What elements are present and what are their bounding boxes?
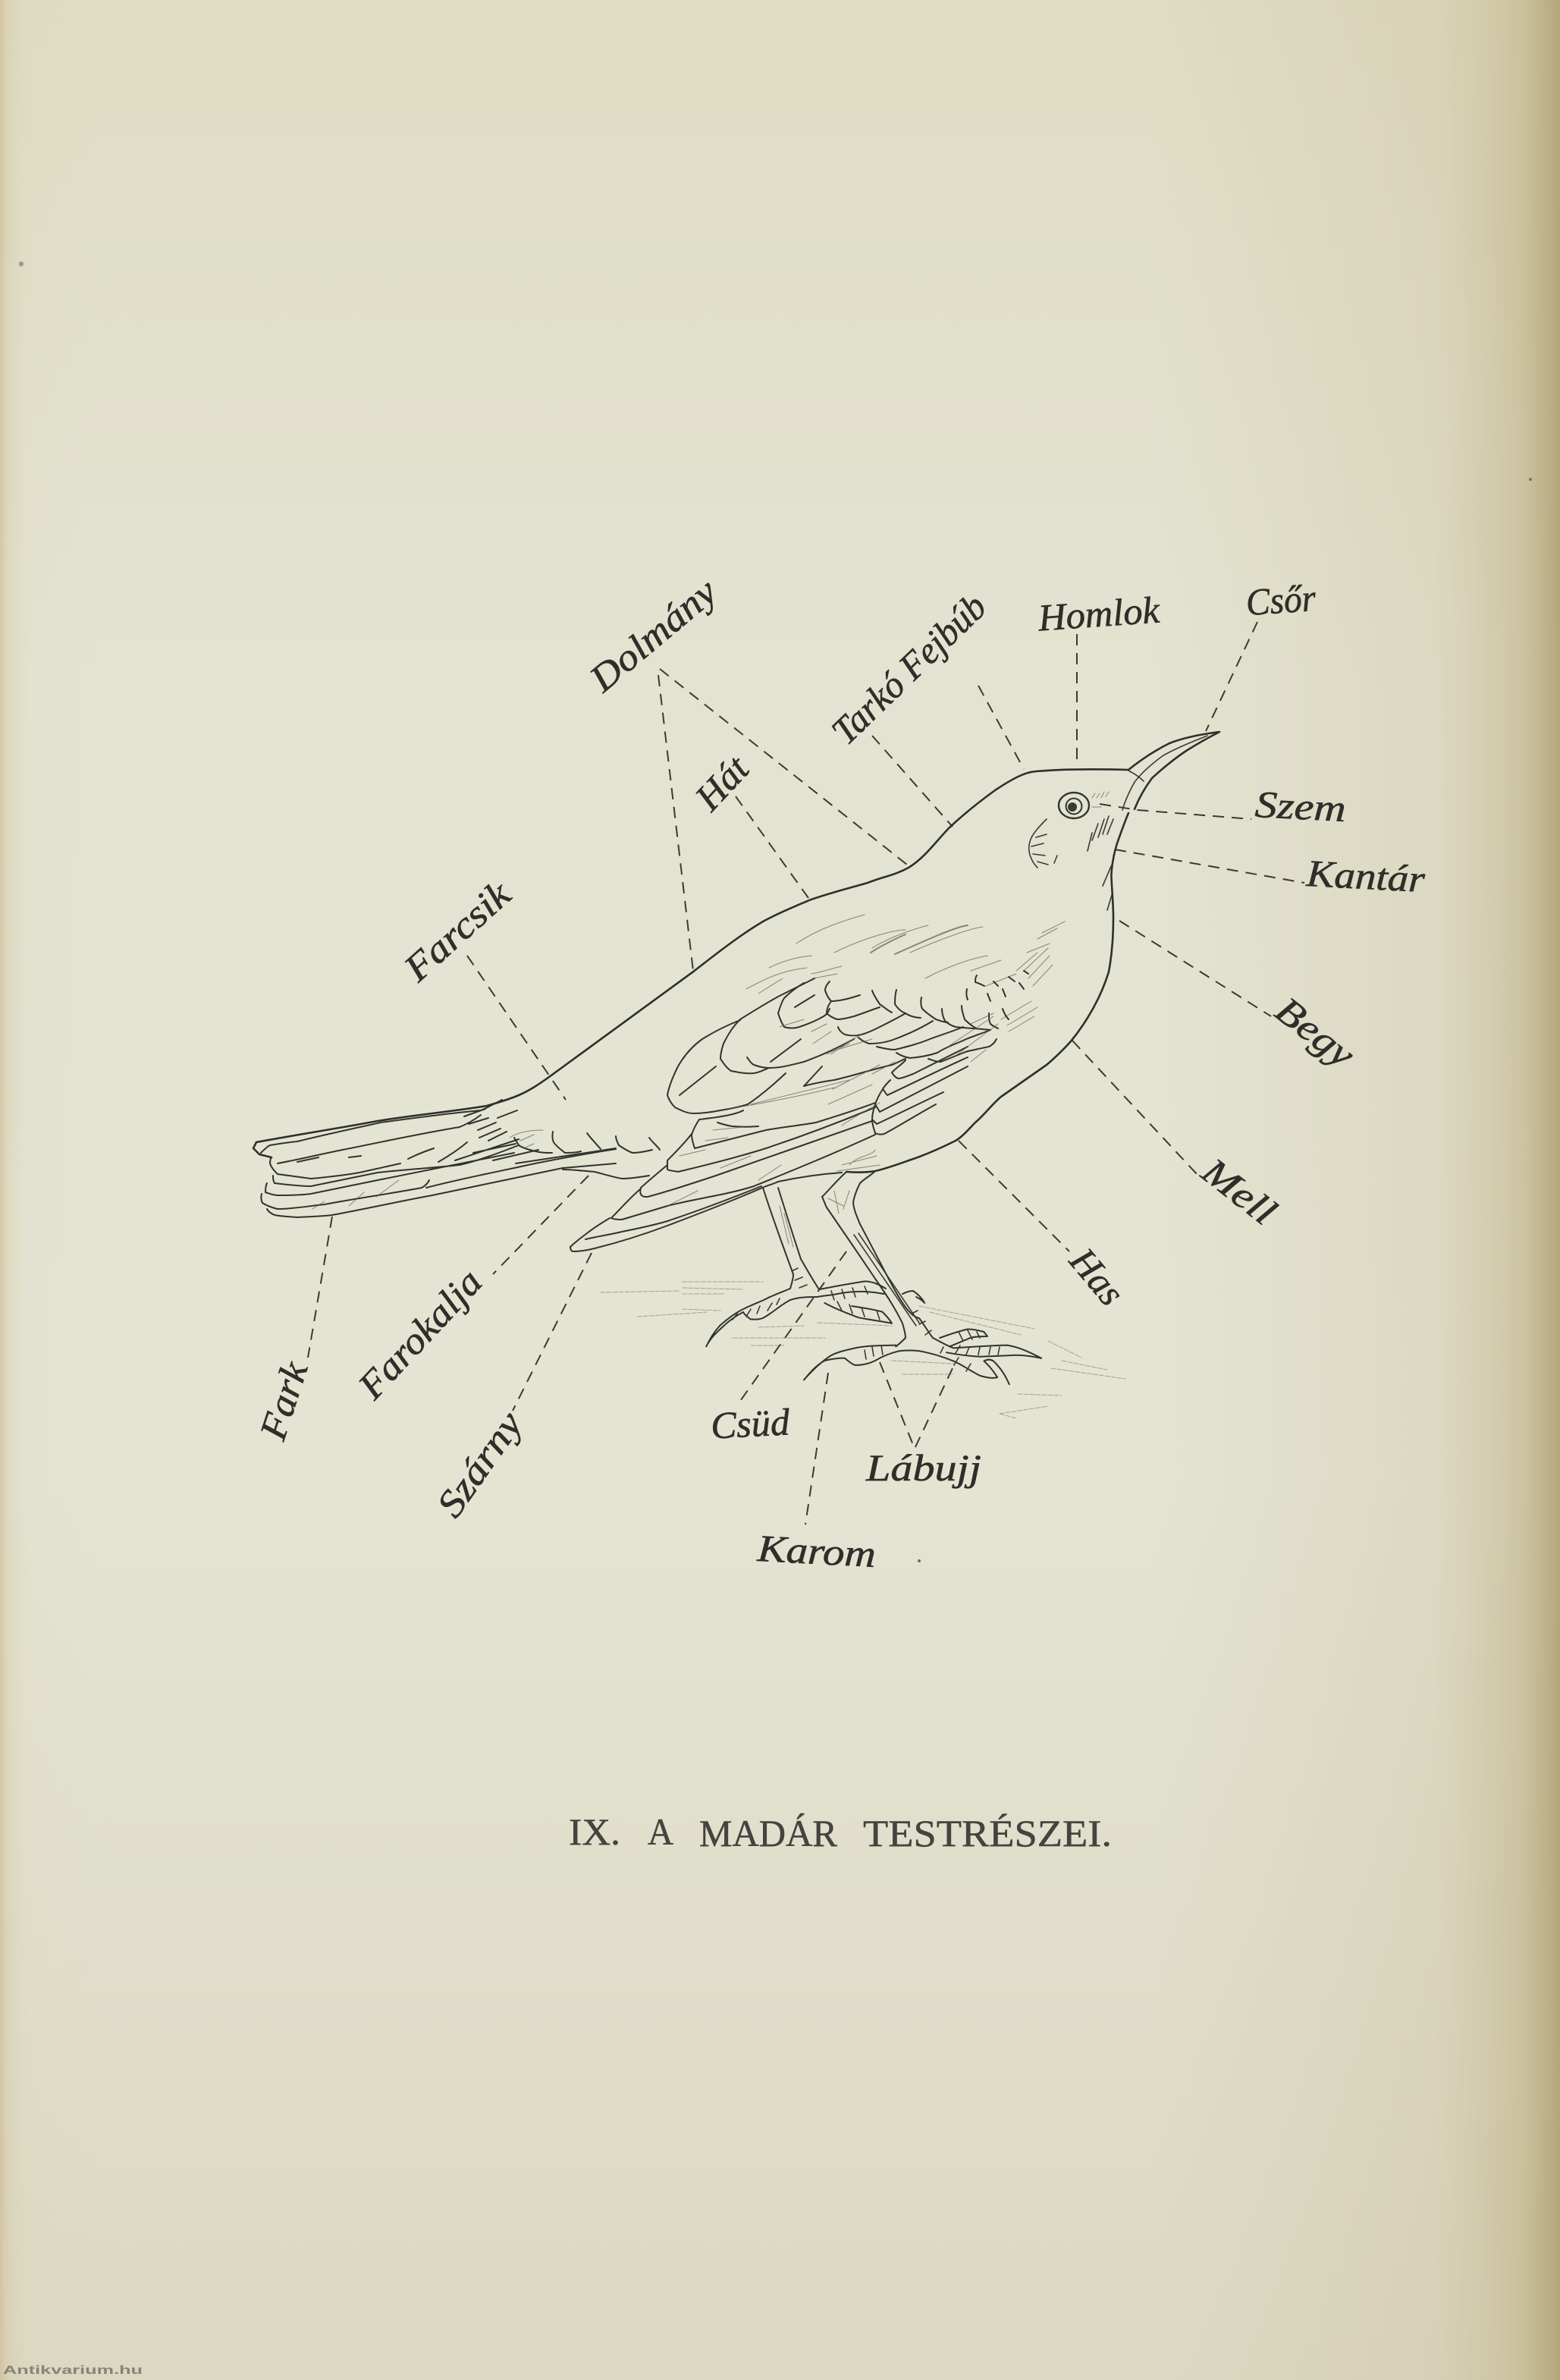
breast and belly outline [846, 813, 1128, 1173]
label: Karom: Karom [755, 1527, 877, 1575]
wing shoulder lobes [667, 978, 854, 1113]
label: Farokalja: Farokalja [349, 1261, 490, 1408]
caption [569, 1810, 1112, 1854]
label: Csüd: Csüd [710, 1400, 792, 1447]
caption: MADÁR [699, 1812, 838, 1854]
wing flight feathers [570, 1047, 968, 1251]
label: Begy: Begy [1268, 988, 1364, 1076]
tail feathers [261, 1100, 660, 1217]
caption: A [648, 1810, 673, 1853]
right leg and foot [804, 1171, 1041, 1384]
beak [1122, 732, 1219, 810]
label: Hát: Hát [686, 747, 758, 819]
label: Kantár: Kantár [1304, 852, 1427, 900]
label: Has: Has [1061, 1239, 1133, 1314]
watermark: Antikvarium.hu [3, 2364, 143, 2377]
label: Farcsik: Farcsik [395, 872, 519, 990]
wing shading [667, 1013, 998, 1206]
eye [1059, 792, 1109, 818]
label: Szem: Szem [1254, 783, 1347, 830]
cheek hatching [1029, 816, 1113, 910]
caption: TESTRÉSZEI. [863, 1812, 1112, 1854]
label: Csőr: Csőr [1245, 576, 1317, 623]
label: Dolmány: Dolmány [581, 570, 725, 700]
label: Lábujj: Lábujj [865, 1446, 981, 1489]
feather hatching on back [746, 915, 1065, 1031]
tail shading [312, 1130, 543, 1209]
dashed leader lines [308, 622, 1304, 1524]
body and tail outline [253, 769, 1128, 1157]
bird illustration [253, 732, 1219, 1418]
ground hatching [601, 1282, 1125, 1418]
left leg and foot [706, 1188, 924, 1346]
label: Szárny: Szárny [428, 1403, 531, 1524]
label: Mell: Mell [1194, 1149, 1285, 1233]
caption: IX. [569, 1810, 620, 1853]
label: Tarkó Fejbúb: Tarkó Fejbúb [823, 585, 994, 752]
label: Homlok: Homlok [1036, 588, 1161, 639]
label: Fark: Fark [251, 1356, 316, 1446]
wing covert scallops [825, 971, 1028, 1062]
